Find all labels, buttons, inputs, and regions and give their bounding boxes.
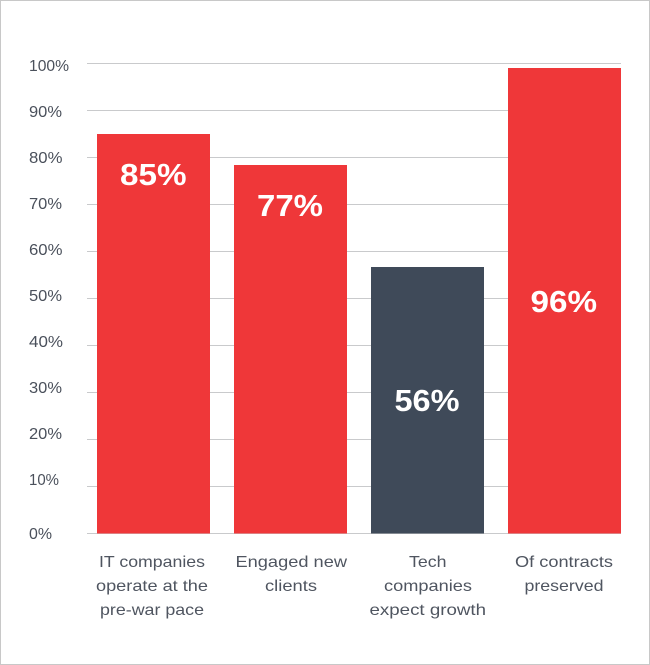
bar: Engaged new clients 77%	[234, 165, 347, 534]
bar: Tech companies expect growth 56%	[371, 267, 484, 534]
category label: IT companies operate at the pre-war pace	[96, 554, 208, 619]
bar: Tech companies expect growth 56%: 56%	[394, 383, 460, 418]
category label: Tech companies expect growth: companies	[384, 578, 472, 595]
category label: Of contracts preserved: Of contracts	[515, 554, 613, 571]
y-axis labels: 10%	[29, 472, 59, 489]
bar: IT companies 85%	[97, 134, 210, 534]
bar: Engaged new clients 77%: 77%	[257, 188, 323, 223]
category label: Engaged new clients: clients	[265, 578, 317, 595]
category label: Engaged new clients	[236, 554, 348, 595]
y-axis labels: 90%	[29, 104, 62, 121]
y-axis labels: 80%	[29, 150, 62, 167]
y-axis labels	[29, 58, 69, 543]
y-axis labels: 20%	[29, 426, 62, 443]
category label: IT companies operate at the pre-war pace: operate at the	[96, 578, 208, 595]
category label: Of contracts preserved	[515, 554, 613, 595]
y-axis labels: 50%	[29, 288, 62, 305]
category label: Tech companies expect growth	[370, 554, 486, 619]
category label: Tech companies expect growth: Tech	[409, 554, 446, 571]
bar: Of contracts preserved 96%	[508, 68, 621, 534]
category label: Of contracts preserved: preserved	[524, 578, 604, 595]
y-axis labels: 60%	[29, 242, 62, 259]
category label: IT companies operate at the pre-war pace: pre-war pace	[100, 602, 204, 619]
bar: IT companies 85%: 85%	[120, 157, 186, 192]
y-axis labels: 100%	[29, 58, 69, 75]
category label: IT companies operate at the pre-war pace: IT companies	[99, 554, 205, 571]
y-axis labels: 0%	[29, 526, 52, 543]
bar: Of contracts preserved 96%: 96%	[530, 284, 597, 319]
y-axis labels: 40%	[29, 334, 63, 351]
category label: Engaged new clients: Engaged new	[236, 554, 348, 571]
y-axis labels: 70%	[29, 196, 62, 213]
y-axis labels: 30%	[29, 380, 62, 397]
category label: Tech companies expect growth: expect growth	[370, 602, 486, 619]
